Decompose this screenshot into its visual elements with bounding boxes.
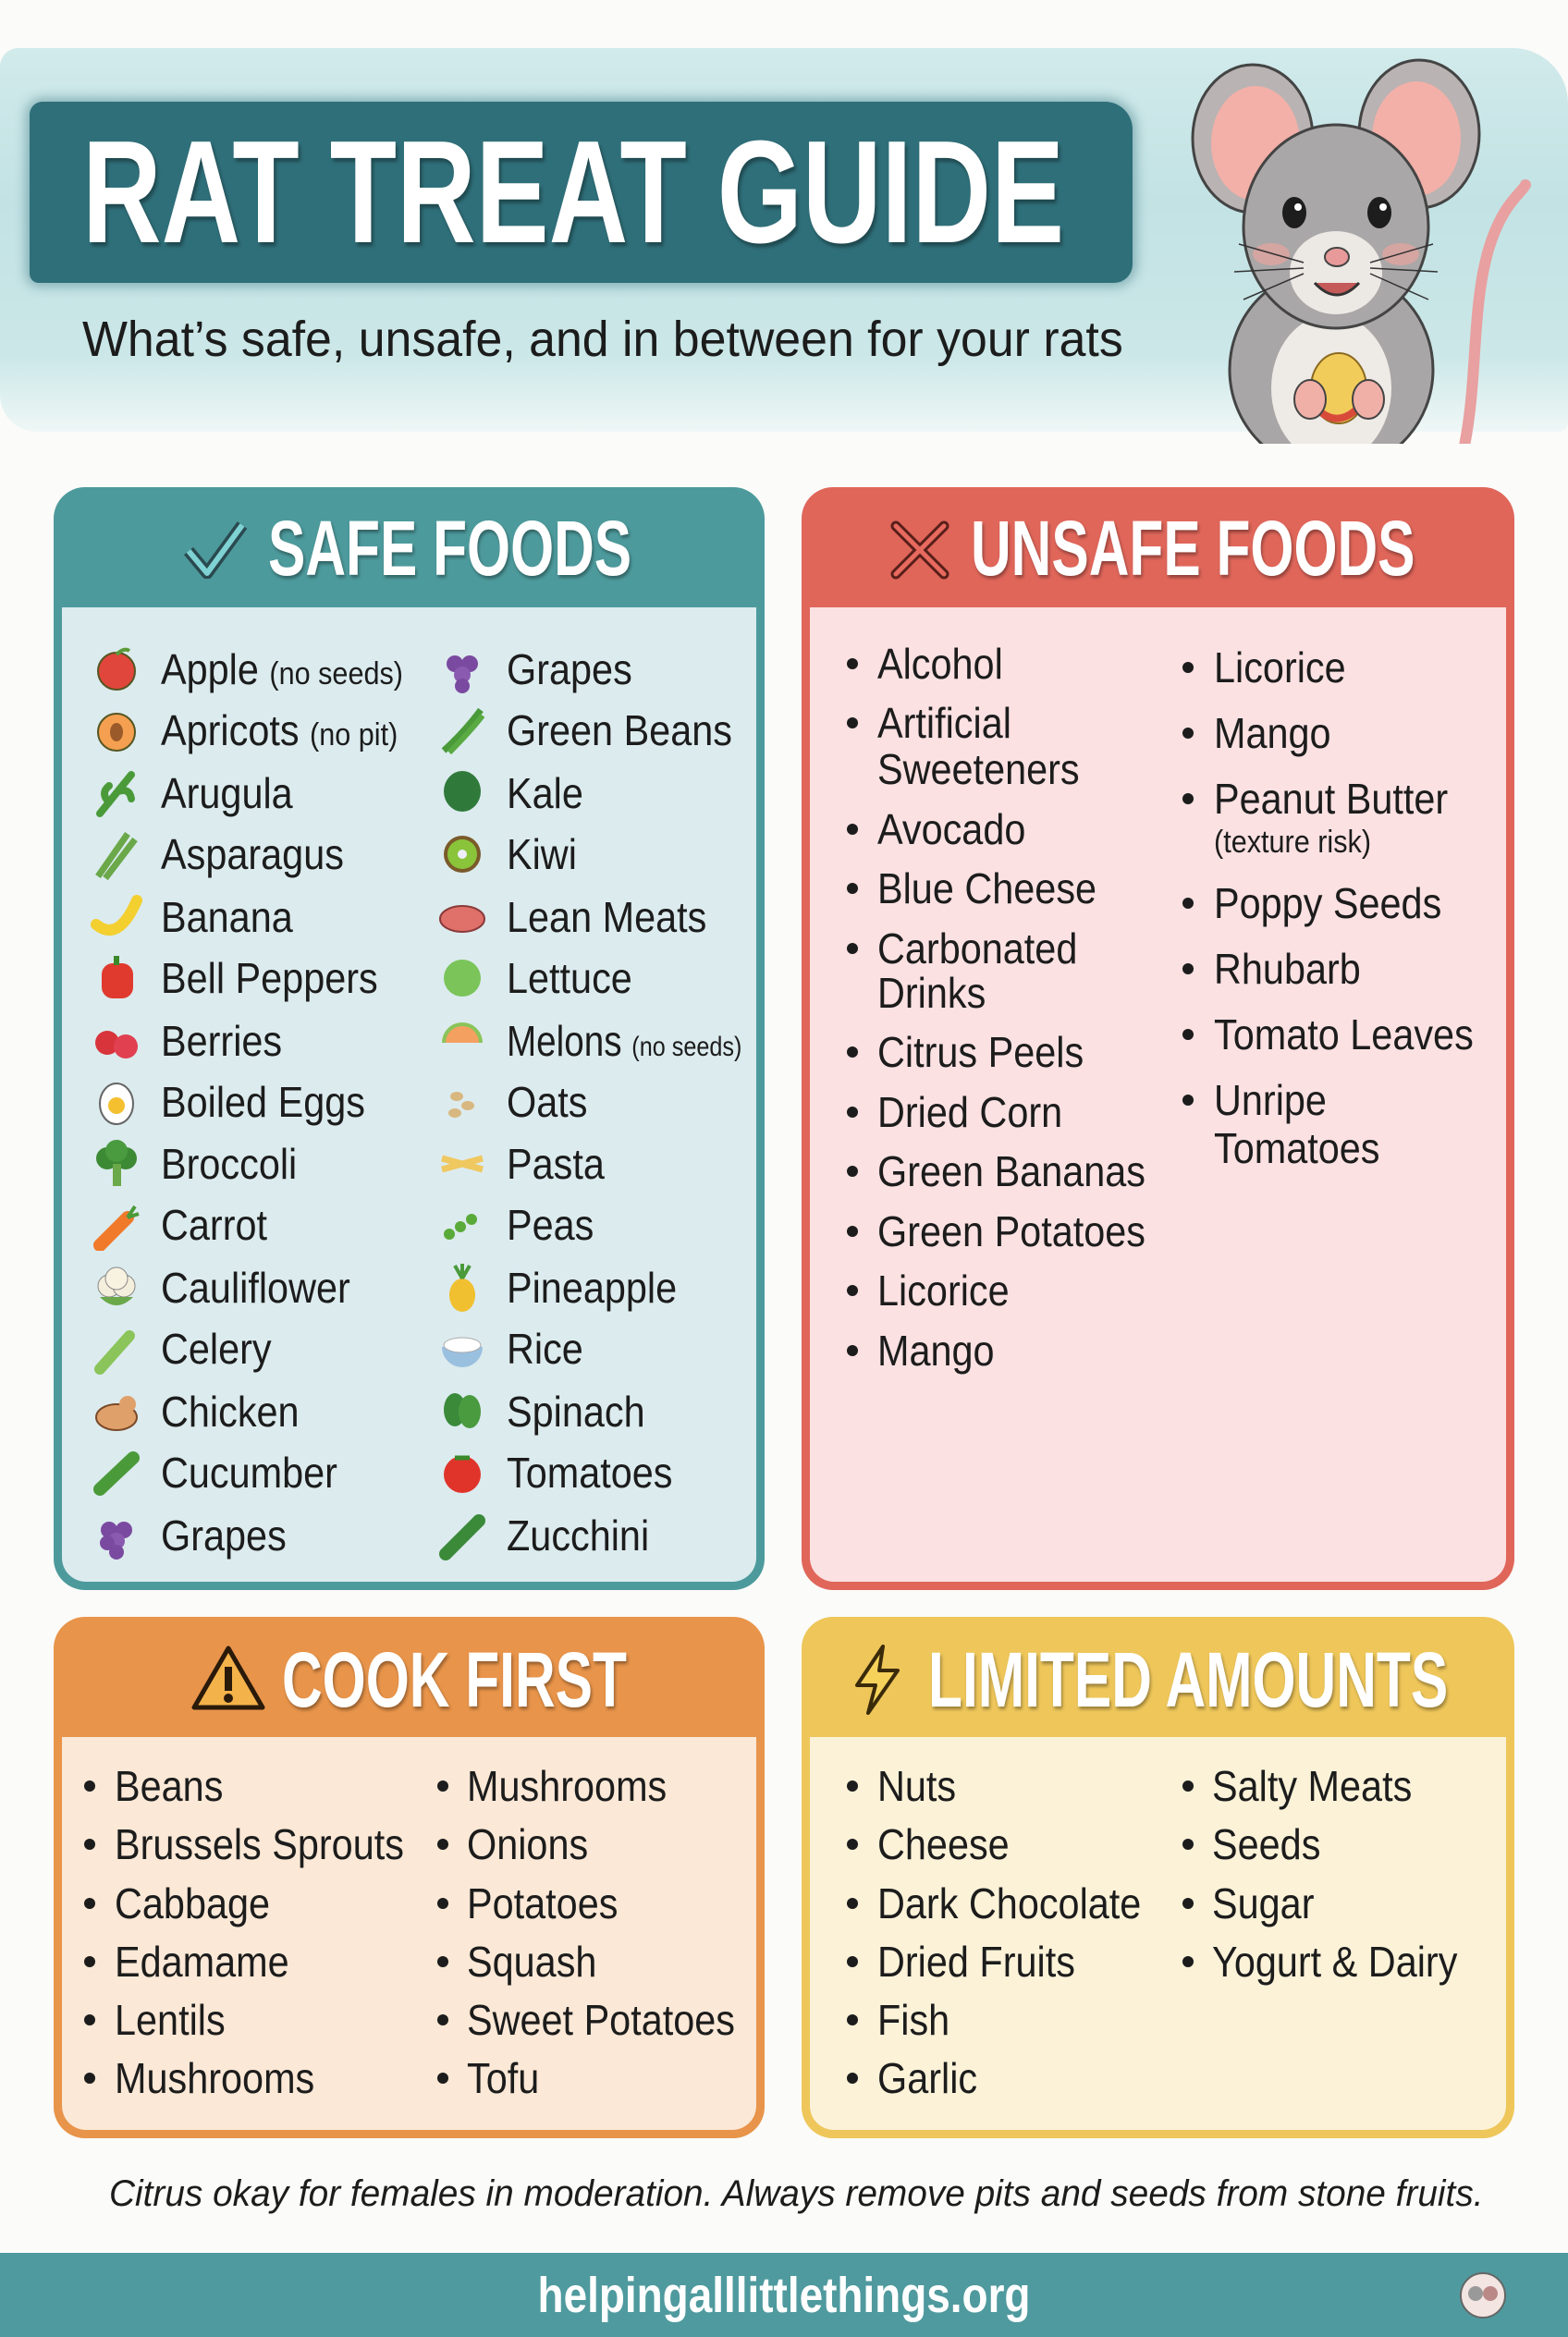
text: Nuts: [877, 1762, 956, 1810]
text: Broccoli: [161, 1140, 297, 1188]
illustration: rat: [1191, 59, 1531, 444]
text: Grapes: [507, 645, 632, 693]
unsafe foods list: [847, 640, 1474, 1375]
text: Apple (no seeds): [161, 645, 403, 693]
text: Edamame: [115, 1938, 289, 1986]
text: Mushrooms: [115, 2054, 314, 2102]
text: Tofu: [467, 2054, 539, 2102]
panel: unsafe foods: [802, 487, 1514, 1590]
text: Mango: [1214, 709, 1331, 757]
text: Salty Meats: [1212, 1762, 1412, 1810]
header: cook first: COOK FIRST: [282, 1636, 627, 1723]
text: Rice: [507, 1325, 583, 1373]
text: Lentils: [115, 1996, 226, 2044]
text: Brussels Sprouts: [115, 1820, 404, 1868]
text: Yogurt & Dairy: [1212, 1938, 1457, 1986]
text: Sugar: [1212, 1879, 1314, 1927]
text: Asparagus: [161, 830, 344, 878]
text: Citrus Peels: [877, 1028, 1084, 1076]
text: Carbonated: [877, 924, 1077, 973]
text: Oats: [507, 1078, 587, 1126]
text: Seeds: [1212, 1820, 1320, 1868]
column 1 icons and items: [91, 645, 403, 1560]
text: Tomatoes: [1214, 1124, 1379, 1172]
text: Onions: [467, 1820, 588, 1868]
safe foods list: [91, 645, 403, 1560]
text: Rhubarb: [1214, 945, 1361, 993]
text: Kiwi: [507, 830, 577, 878]
text: Green Potatoes: [877, 1207, 1145, 1255]
text: Poppy Seeds: [1214, 879, 1441, 927]
text: Bell Peppers: [161, 954, 378, 1002]
text: Peas: [507, 1201, 594, 1249]
icon: logo: [1460, 2272, 1506, 2319]
text: (texture risk): [1214, 825, 1371, 860]
text: Arugula: [161, 769, 293, 817]
text: Tomatoes: [507, 1449, 672, 1497]
text: Tomato Leaves: [1214, 1010, 1474, 1058]
text: Green Bananas: [877, 1147, 1145, 1195]
text: Sweet Potatoes: [467, 1996, 735, 2044]
safe foods column 2: [439, 645, 741, 1560]
limited amounts list: [847, 1762, 1457, 2102]
text: Licorice: [877, 1266, 1010, 1315]
text: Sweeteners: [877, 745, 1080, 793]
text: Lean Meats: [507, 893, 706, 941]
text: Dried Corn: [877, 1088, 1062, 1136]
text: Drinks: [877, 969, 986, 1017]
cook first list: [84, 1762, 735, 2102]
text: Avocado: [877, 805, 1025, 853]
text: Apricots (no pit): [161, 706, 398, 754]
text: Grapes: [161, 1511, 287, 1560]
text: Licorice: [1214, 643, 1346, 691]
text: Lettuce: [507, 954, 632, 1002]
text: Cauliflower: [161, 1264, 350, 1312]
text: Berries: [161, 1017, 282, 1065]
text: Fish: [877, 1996, 949, 2044]
header: safe foods: SAFE FOODS: [268, 505, 631, 592]
icon: warning triangle: [192, 1646, 264, 1710]
title banner: [30, 102, 1133, 283]
title: RAT TREAT GUIDE: [82, 111, 1064, 274]
panel: limited amounts: [802, 1617, 1514, 2138]
icon: x mark: [891, 521, 949, 579]
panel: safe foods: [54, 487, 765, 1590]
footer bar: [0, 2253, 1568, 2337]
icon: check mark: [184, 521, 248, 579]
text: Artificial: [877, 699, 1011, 747]
text: Carrot: [161, 1201, 267, 1249]
header watercolor band: [0, 48, 1568, 432]
text: Boiled Eggs: [161, 1078, 365, 1126]
footnote: Citrus okay for females in moderation. Always remove pits and seeds from stone fruits.: [109, 2173, 1484, 2214]
header: unsafe foods: UNSAFE FOODS: [971, 505, 1415, 592]
text: Green Beans: [507, 706, 732, 754]
icon: lightning bolt: [854, 1645, 900, 1715]
text: Spinach: [507, 1388, 645, 1436]
panel: cook first: [54, 1617, 765, 2138]
text: Celery: [161, 1325, 272, 1373]
text: Blue Cheese: [877, 864, 1096, 912]
text: Unripe: [1214, 1076, 1327, 1124]
text: Melons (no seeds): [507, 1017, 741, 1065]
text: Cheese: [877, 1820, 1010, 1868]
text: Dark Chocolate: [877, 1879, 1141, 1927]
text: Cucumber: [161, 1449, 337, 1497]
text: Mushrooms: [467, 1762, 667, 1810]
text: Beans: [115, 1762, 223, 1810]
text: Kale: [507, 769, 583, 817]
text: Mango: [877, 1327, 995, 1375]
text: Squash: [467, 1938, 596, 1986]
text: Potatoes: [467, 1879, 618, 1927]
text: Zucchini: [507, 1511, 649, 1560]
text: Garlic: [877, 2054, 977, 2102]
footer url: helpingalllittlethings.org: [538, 2268, 1030, 2323]
text: Pasta: [507, 1140, 605, 1188]
text: Dried Fruits: [877, 1938, 1075, 1986]
text: Pineapple: [507, 1264, 677, 1312]
text: Chicken: [161, 1388, 300, 1436]
text: Alcohol: [877, 640, 1003, 688]
subtitle: What’s safe, unsafe, and in between for your rats: [82, 312, 1123, 367]
header: limited amounts: LIMITED AMOUNTS: [928, 1636, 1448, 1723]
text: Peanut Butter: [1214, 775, 1448, 823]
text: Cabbage: [115, 1879, 270, 1927]
text: Banana: [161, 893, 293, 941]
